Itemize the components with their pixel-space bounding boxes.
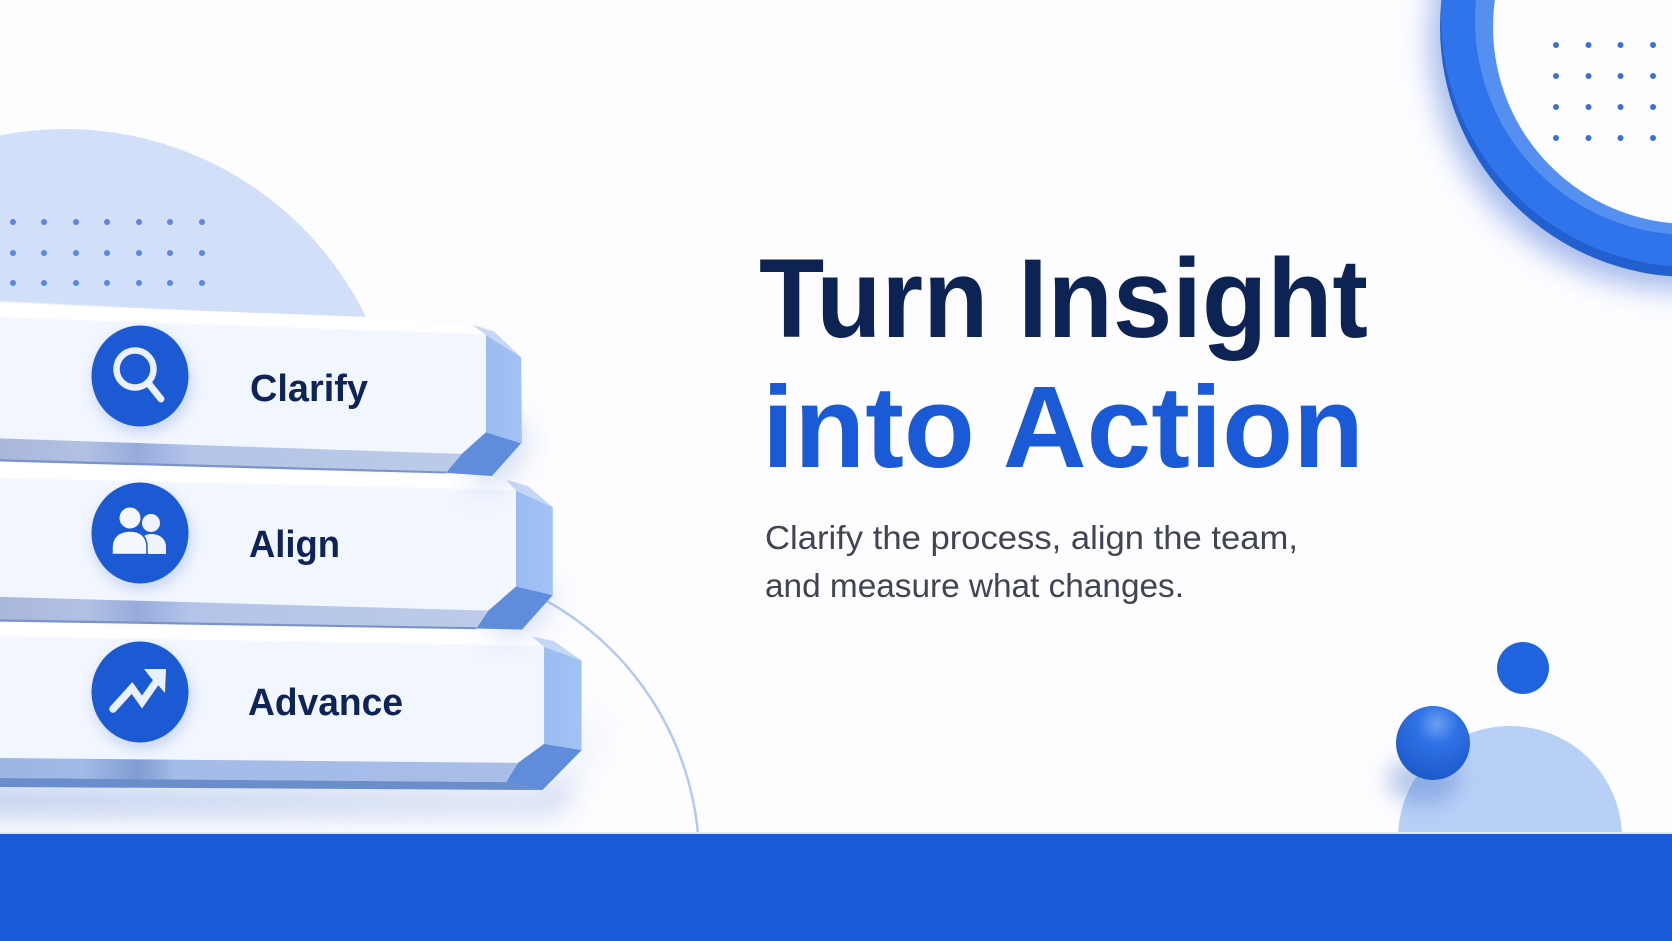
decorative pale circle and dot grid behind bars bbox=[0, 129, 366, 317]
subtitle: Clarify the process, align the team, bbox=[765, 519, 1298, 556]
ring: top right bbox=[1430, 0, 1672, 290]
bottom band bbox=[0, 832, 1672, 941]
pale semicircle: bottom right bbox=[1398, 726, 1622, 941]
title bbox=[759, 236, 1368, 492]
subtitle: and measure what changes. bbox=[765, 567, 1184, 604]
label: Align: Align bbox=[249, 524, 340, 566]
title: into Action bbox=[762, 362, 1364, 492]
subtitle bbox=[765, 519, 1298, 604]
label: Advance: Advance bbox=[248, 682, 403, 724]
bar: Advance bbox=[0, 623, 600, 815]
small blue dot bbox=[1497, 642, 1549, 694]
sphere with shadow bbox=[1388, 706, 1470, 804]
icon badge: trend arrow bbox=[92, 642, 192, 750]
bar: Clarify bbox=[0, 301, 530, 490]
title: Turn Insight bbox=[759, 236, 1368, 361]
label: Clarify: Clarify bbox=[250, 368, 368, 410]
bar: Align bbox=[0, 463, 555, 640]
dot grid: top right bbox=[1553, 42, 1656, 141]
thin arc behind bars bbox=[545, 600, 698, 834]
icon badge: people bbox=[92, 482, 192, 591]
icon badge: magnifier bbox=[92, 326, 192, 434]
